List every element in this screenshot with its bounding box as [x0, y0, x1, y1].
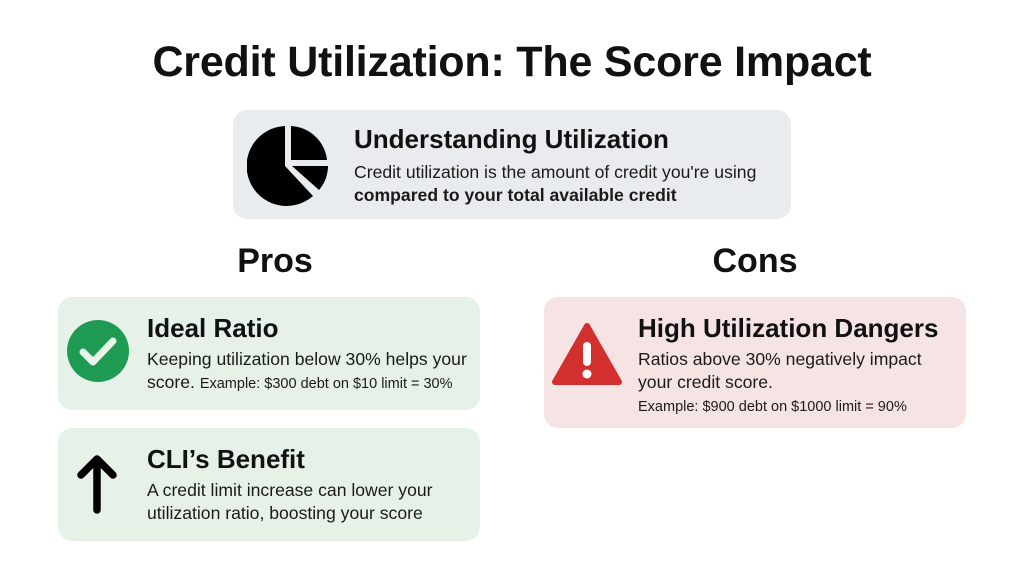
text: compared to your total available credit [354, 185, 677, 205]
text: your credit score. [638, 372, 773, 392]
text: Example: $900 debt on $1000 limit = 90% [638, 399, 907, 415]
heading: cons: Cons [712, 242, 798, 280]
heading: pros: Pros [237, 242, 313, 280]
text: Credit utilization is the amount of credit you're using [354, 162, 756, 182]
text: Keeping utilization below 30% helps your [147, 349, 467, 369]
icon: check [67, 320, 129, 382]
icon: pie chart [247, 126, 328, 206]
panel: understanding utilization [233, 110, 791, 219]
text: Ratios above 30% negatively impact [638, 349, 922, 369]
icon: up arrow [77, 455, 117, 514]
panel: ideal ratio [58, 297, 480, 410]
heading: High Utilization Dangers [638, 313, 938, 343]
title: Credit Utilization: The Score Impact [152, 38, 872, 86]
text: utilization ratio, boosting your score [147, 503, 423, 523]
text: score. Example: $300 debt on $10 limit = 30% [147, 372, 453, 392]
text [354, 162, 756, 205]
heading: CLI’s Benefit [147, 444, 305, 474]
icon: warning [552, 323, 622, 385]
text [147, 480, 433, 523]
panel: high utilization dangers [544, 297, 966, 428]
panel: CLI benefit [58, 428, 480, 541]
heading: Understanding Utilization [354, 124, 669, 154]
text: A credit limit increase can lower your [147, 480, 433, 500]
text [147, 349, 467, 392]
text [638, 349, 922, 415]
heading: Ideal Ratio [147, 313, 278, 343]
